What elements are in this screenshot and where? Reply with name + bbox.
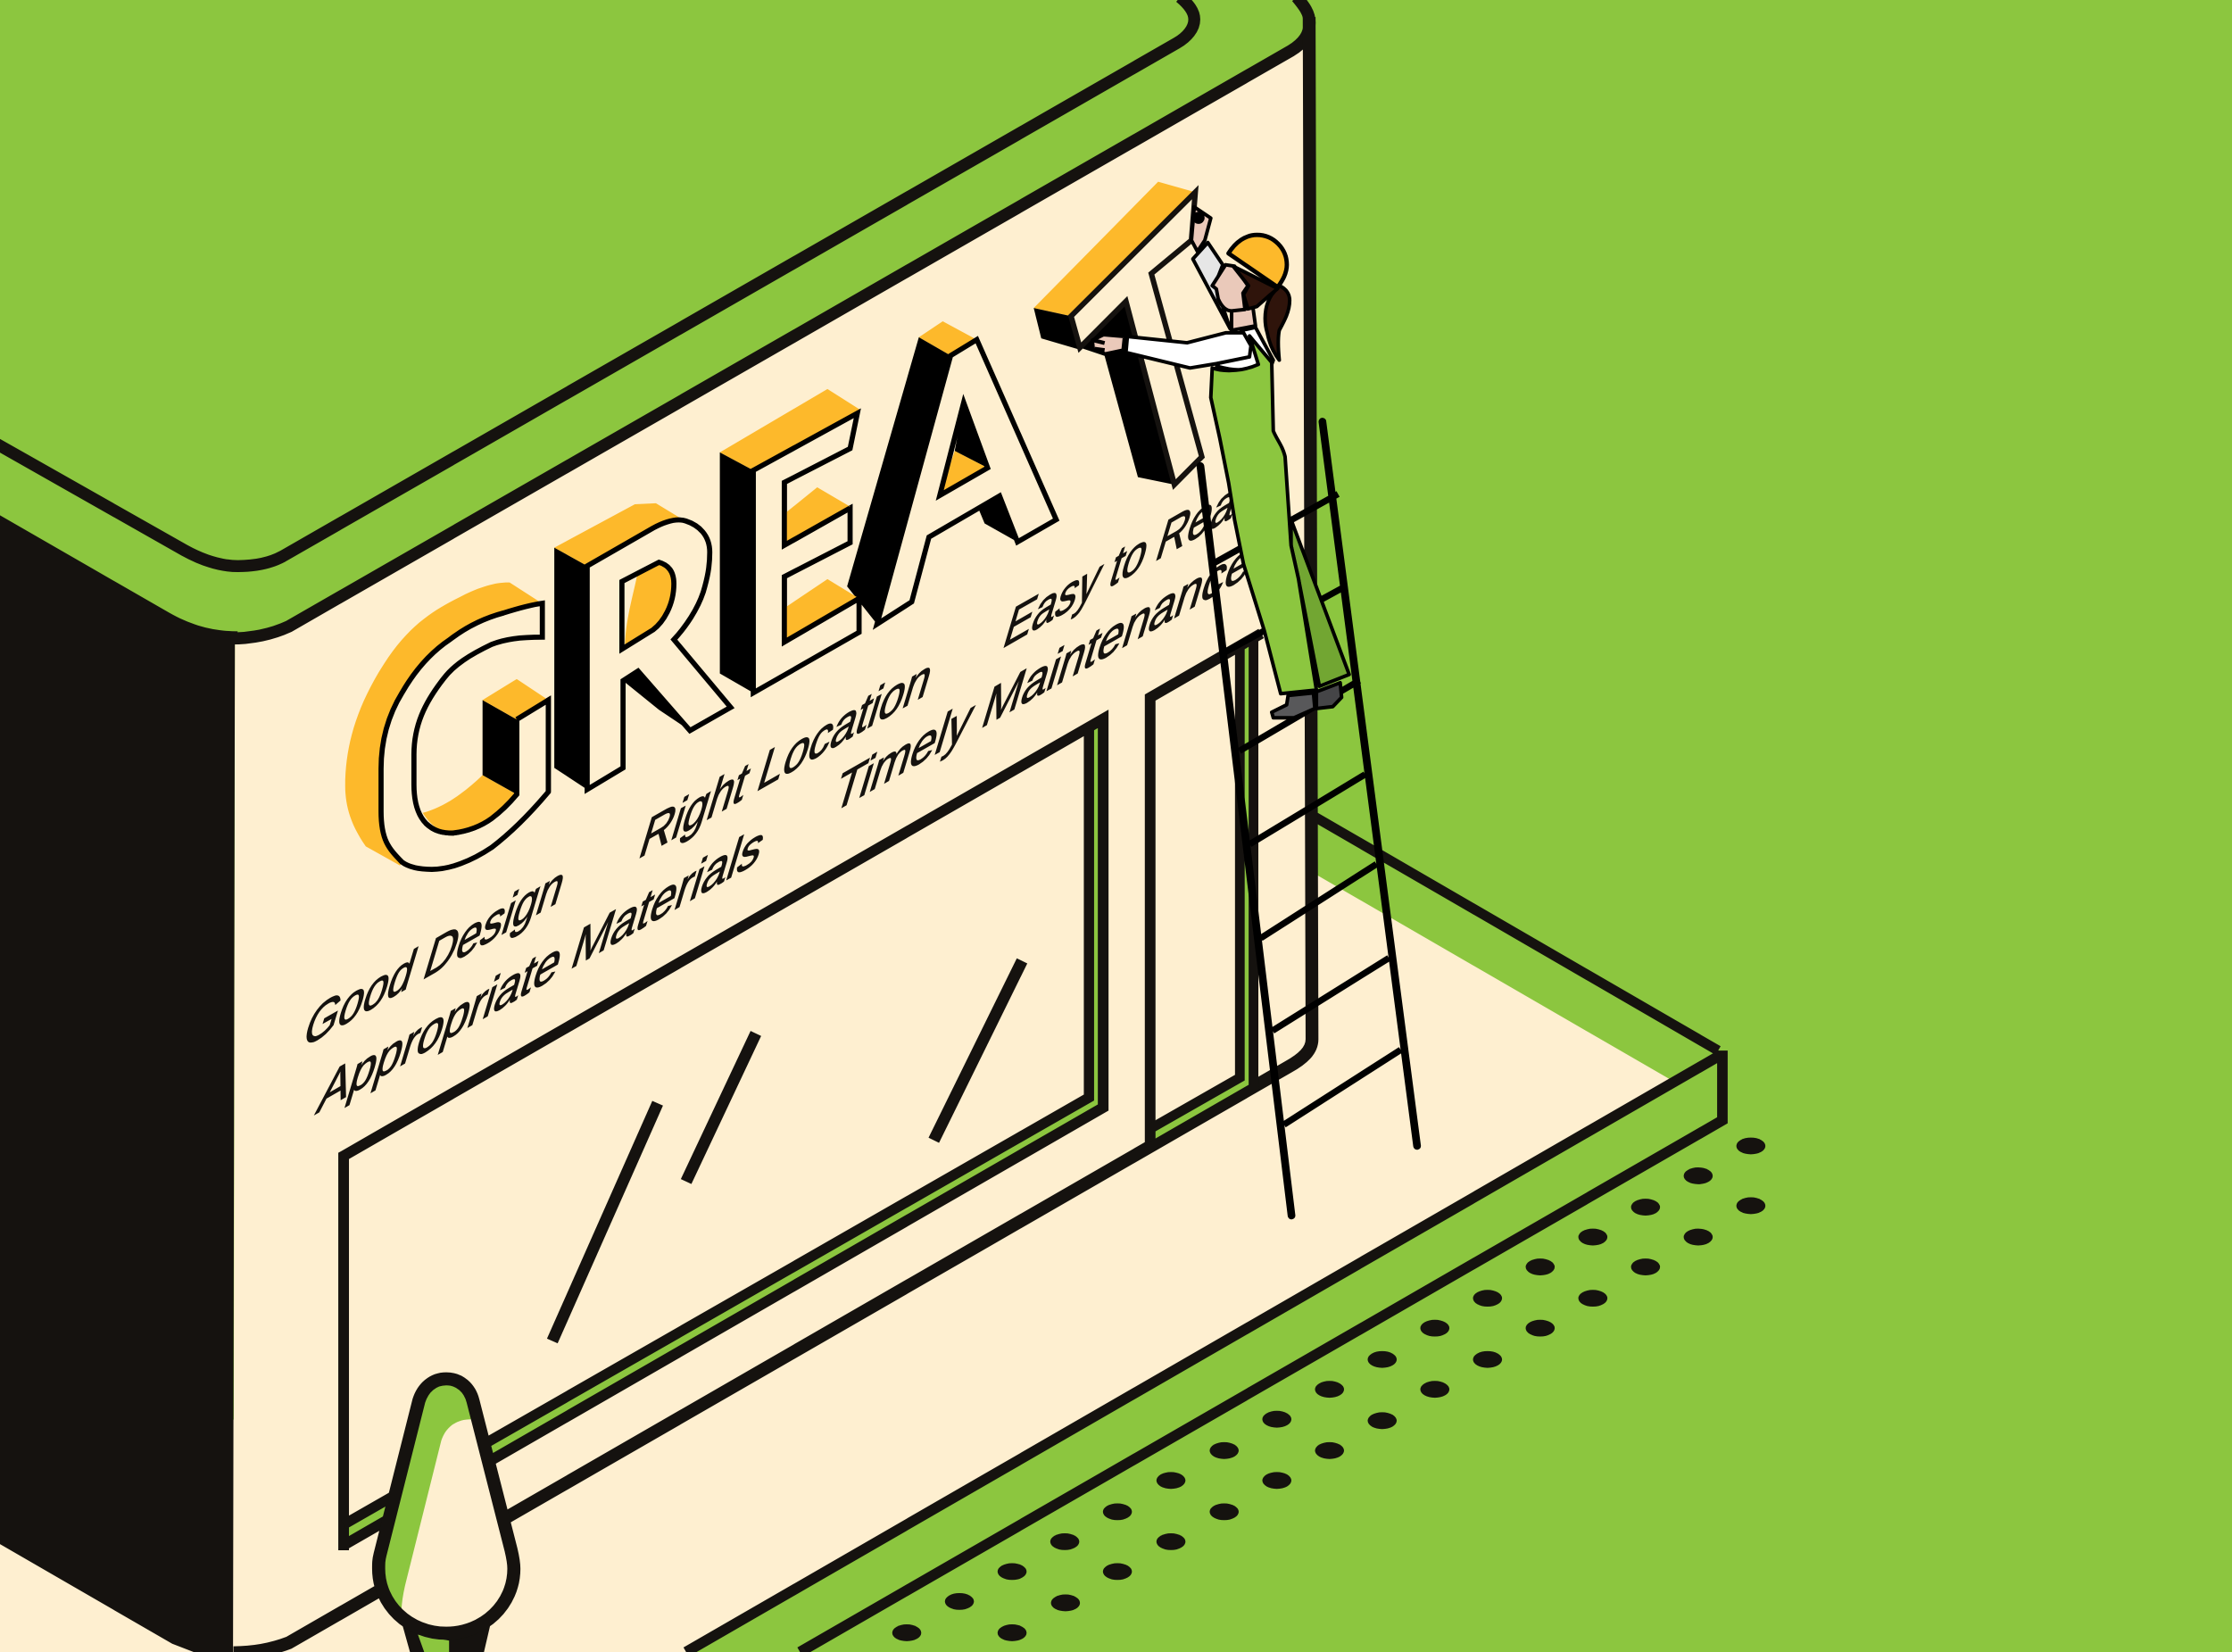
hair [1233, 266, 1278, 309]
shoes [1272, 683, 1341, 718]
letter R [554, 503, 731, 790]
dot pattern on ground [892, 1138, 1765, 1641]
slogan texts: Easy to Read [997, 452, 1270, 662]
ground platform [0, 818, 1722, 1652]
tree [378, 1379, 514, 1652]
face [1212, 265, 1248, 311]
overalls [1211, 336, 1349, 693]
door [1148, 634, 1261, 1149]
letter E [720, 389, 860, 693]
letter T [1033, 182, 1202, 485]
ponytail [1265, 286, 1290, 361]
letter G [345, 583, 548, 869]
ladder rungs [1213, 494, 1401, 1125]
extended arm [1092, 333, 1251, 368]
neck [1232, 303, 1256, 330]
hard hat [1229, 235, 1287, 287]
tree crown [378, 1379, 514, 1633]
shop wall [0, 0, 1312, 1652]
window glare lines [552, 961, 1022, 1341]
slogan texts: Appropriate Materials [311, 810, 773, 1127]
roof edge line [0, 0, 1194, 566]
slogan texts [296, 452, 1270, 1127]
tree trunk [402, 1622, 491, 1652]
raised arm [1191, 207, 1230, 328]
slogan texts: Timely Maintenance [826, 525, 1263, 827]
shoulder and collar [1216, 328, 1274, 369]
sign letters GREAT [345, 182, 1202, 869]
slogan texts: Right Location [633, 643, 941, 873]
shop window [344, 718, 1103, 1550]
worker [1092, 207, 1349, 718]
ladder rails [1200, 421, 1417, 1216]
slogan texts: Good Design [296, 851, 574, 1062]
ladder [1200, 421, 1417, 1216]
letter A [847, 321, 1057, 624]
